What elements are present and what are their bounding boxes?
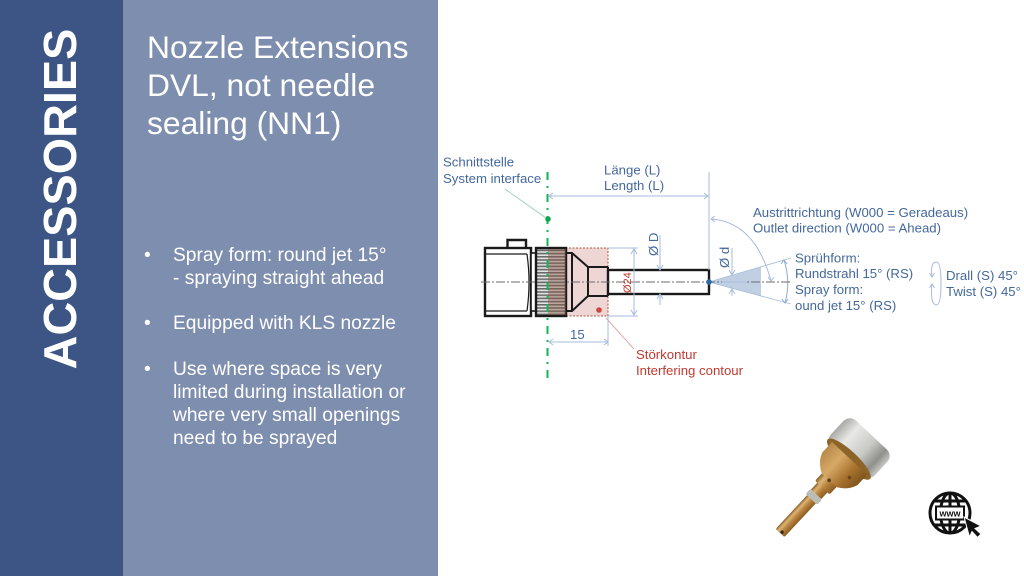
label: twist: Drall (S) 45°: [946, 268, 1018, 283]
panel: description: [123, 0, 438, 576]
spray cone: [709, 258, 791, 304]
label: outer diameter: Ø D: [646, 233, 661, 256]
bullet: spray form: [144, 245, 387, 289]
label: dimension 15: 15: [570, 327, 585, 342]
label: interface: System interface: [443, 171, 541, 186]
bullet: usage: •: [144, 359, 151, 380]
system interface line: [505, 172, 551, 380]
title: Nozzle Extensions: [147, 28, 409, 64]
bullet: spray form: Spray form: round jet 15°: [173, 245, 387, 266]
title: [147, 28, 409, 140]
bullet: usage: Use where space is very: [173, 359, 382, 380]
nozzle body outline: [485, 240, 709, 316]
bullet: usage: limited during installation or: [173, 382, 406, 403]
label: interfering contour: Störkontur: [636, 347, 697, 362]
title: sealing (NN1): [147, 104, 341, 140]
end point: [706, 279, 712, 285]
label: length: Länge (L): [604, 162, 660, 178]
panel: accessories sidebar: [0, 0, 123, 576]
label: outlet direction: Outlet direction (W000 = Ahead): [753, 220, 941, 236]
label: interfering contour: Interfering contour: [636, 363, 744, 378]
label: length: Length (L): [604, 178, 664, 193]
image: nozzle photo: [758, 415, 893, 553]
bullet: spray form: - spraying straight ahead: [173, 268, 384, 289]
label: contour diameter: Ø24: [622, 272, 634, 293]
label: spray form: Rundstrahl 15° (RS): [795, 266, 913, 281]
title: DVL, not needle: [147, 66, 375, 102]
label: spray form: Spray form:: [795, 282, 863, 297]
bullet: usage: where very small openings: [173, 405, 400, 426]
label: spray form: ound jet 15° (RS): [795, 298, 896, 313]
bullet list: [144, 245, 406, 449]
icon: www globe with cursor: [930, 493, 981, 538]
label: interface: Schnittstelle: [443, 154, 514, 170]
bullet: KLS nozzle: Equipped with KLS nozzle: [173, 313, 396, 334]
bullet: spray form: •: [144, 245, 151, 266]
centre line: [481, 281, 791, 283]
bullet: usage: need to be sprayed: [173, 428, 337, 449]
label: inner diameter: Ø d: [717, 247, 732, 268]
drawing: nozzle schematic: [443, 154, 1021, 380]
label: outlet direction: Austrittrichtung (W000 = Geradeaus): [753, 205, 968, 220]
bullet: KLS nozzle: •: [144, 313, 151, 334]
label: twist: Twist (S) 45°: [946, 284, 1021, 299]
interfering contour zone: [548, 248, 634, 349]
icon: www globe with cursor: www: [938, 508, 961, 518]
label: spray form: Sprühform:: [795, 250, 860, 266]
dimension lines: [549, 172, 941, 346]
bullet: usage: [144, 359, 406, 449]
heading: ACCESSORIES: ACCESSORIES: [34, 29, 86, 369]
